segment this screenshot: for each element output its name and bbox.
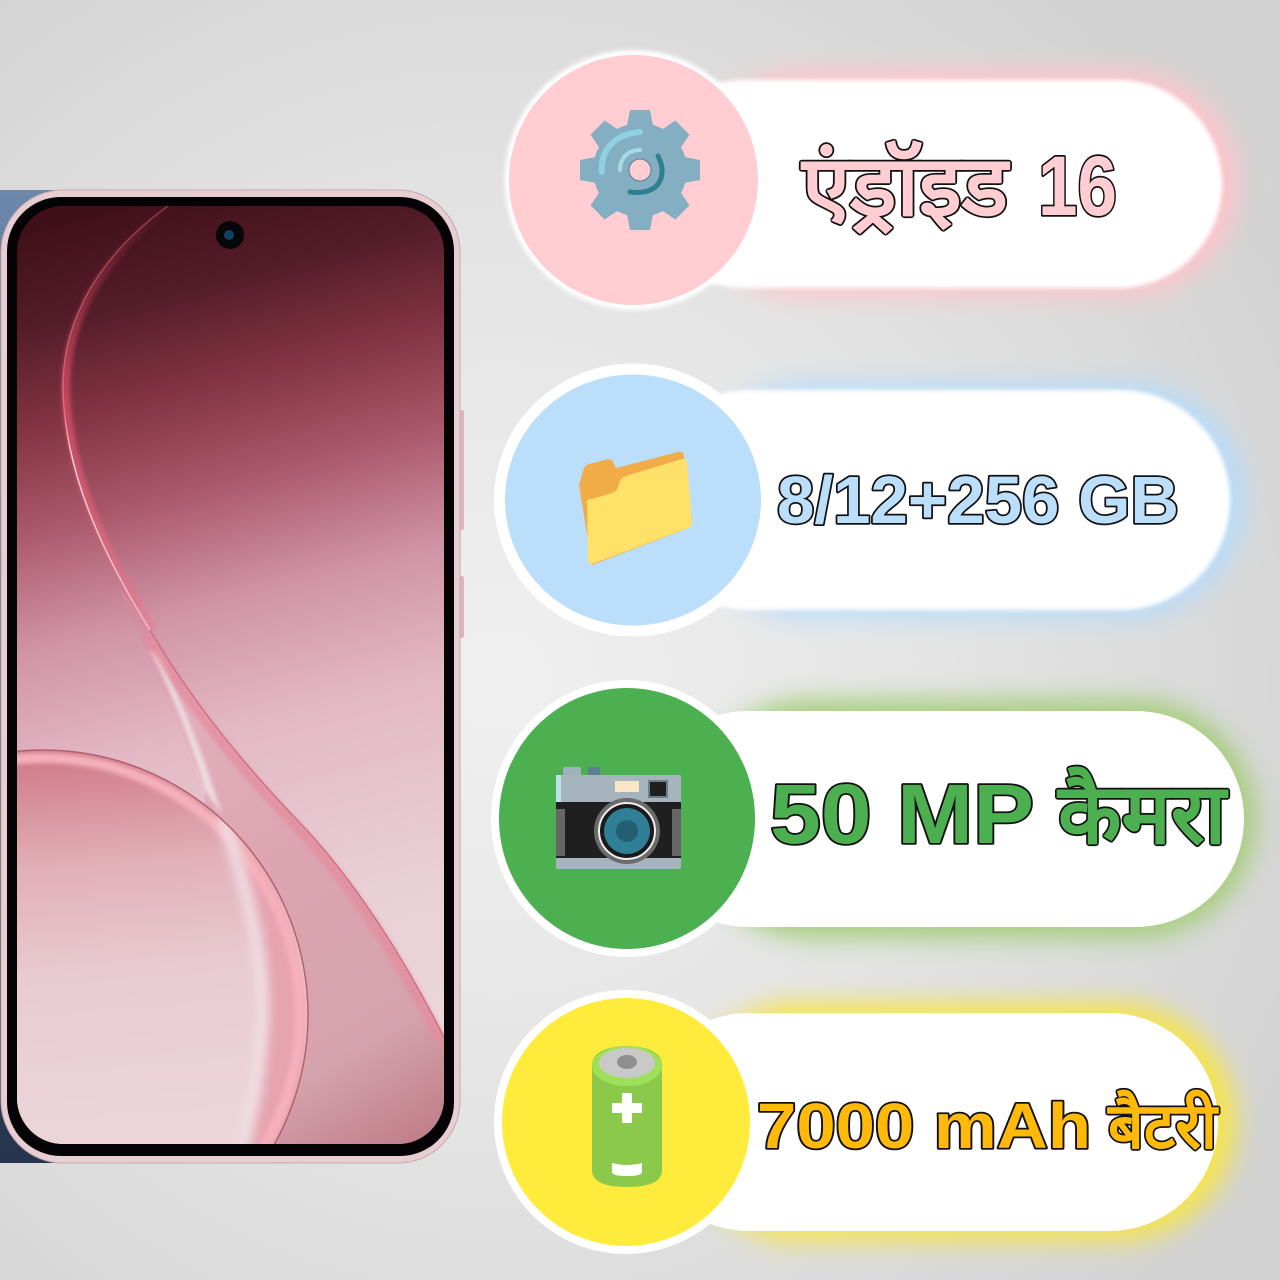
icon: folder bbox=[579, 452, 692, 565]
phone frame bbox=[1, 190, 460, 1163]
label bbox=[770, 766, 1229, 861]
second phone peeking behind bbox=[0, 190, 80, 1163]
label bbox=[757, 1089, 1219, 1162]
label: कैमरा bbox=[1056, 766, 1229, 861]
circle bbox=[499, 688, 755, 949]
icon: camera bbox=[556, 767, 681, 869]
circle bbox=[505, 374, 761, 626]
circle bbox=[504, 50, 762, 310]
panel: storage bbox=[505, 374, 1246, 626]
side buttons bbox=[458, 410, 464, 638]
black bezel bbox=[7, 197, 454, 1156]
label: 8/12+256 GB bbox=[777, 463, 1179, 538]
panel: android bbox=[504, 50, 1238, 310]
front camera bbox=[216, 221, 244, 249]
phone bbox=[0, 190, 464, 1164]
label: एंड्रॉइड bbox=[800, 139, 1011, 235]
icon: gear bbox=[580, 110, 700, 230]
circle bbox=[502, 998, 750, 1246]
label: 50 MP bbox=[770, 767, 1034, 861]
label bbox=[800, 139, 1117, 235]
label: 16 bbox=[1038, 139, 1117, 233]
wallpaper bbox=[17, 206, 444, 1144]
panel: camera bbox=[499, 688, 1256, 949]
icon: battery bbox=[592, 1046, 662, 1187]
panel: battery bbox=[502, 998, 1236, 1246]
label: 7000 mAh bbox=[757, 1090, 1091, 1162]
label: बैटरी bbox=[1107, 1089, 1219, 1162]
